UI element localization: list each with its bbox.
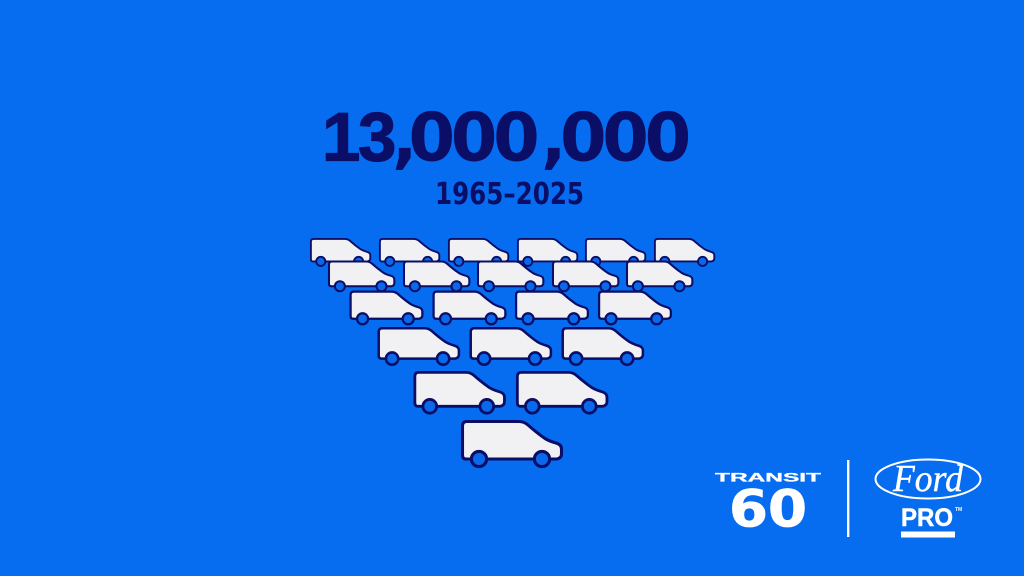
- 60 numerals: 60: [729, 480, 807, 540]
- van row 1: [311, 239, 714, 266]
- Ford script: Ford: [892, 458, 964, 500]
- logo divider: [847, 460, 849, 537]
- logo: Ford Pro: [876, 458, 980, 538]
- van pyramid: [311, 239, 714, 467]
- trademark: TM: [955, 507, 962, 513]
- Ford oval: [876, 460, 980, 498]
- Transit wordmark: TRANSIT: [715, 470, 822, 484]
- van row 3: [351, 292, 671, 324]
- Pro underline: [901, 532, 955, 538]
- van row 5: [415, 372, 607, 413]
- van row 2: [329, 261, 692, 291]
- van row 4: [379, 328, 643, 365]
- logo: Transit 60: [715, 470, 822, 540]
- Pro wordmark: PRO: [901, 504, 953, 532]
- subtitle: years: 1965–2025: [435, 177, 584, 212]
- van row 6: [462, 422, 562, 467]
- title: total vans: 13,000,000: [322, 98, 691, 176]
